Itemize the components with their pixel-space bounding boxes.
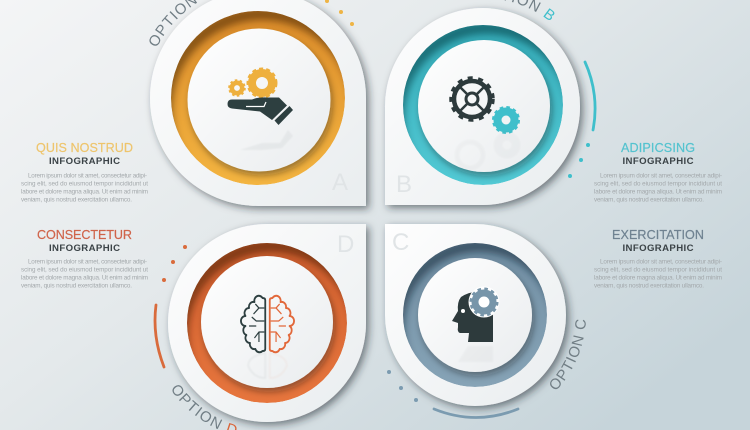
decoration: D arc and dots <box>155 245 187 367</box>
teal ring B <box>403 25 563 185</box>
text block: Consectetur: CONSECTETUR <box>37 228 132 242</box>
text block: Adipicsing: labore et dolore magna aliqua. Ut enim ad minim <box>594 188 722 196</box>
letter A: A <box>332 169 348 196</box>
inner disc C <box>418 258 532 372</box>
text block: Quis Nostrud: labore et dolore magna aliqua. Ut enim ad minim <box>21 188 148 196</box>
letter B: B <box>396 171 412 198</box>
panel: option B <box>385 8 580 206</box>
text block: Consectetur: labore et dolore magna aliqua. Ut enim ad minim <box>21 274 148 282</box>
text block: Quis Nostrud: QUIS NOSTRUD <box>36 141 133 155</box>
text block: Adipicsing: ADIPICSING <box>621 141 695 155</box>
text block: Exercitation: Lorem ipsum dolor sit amet, consectetur adipi- <box>600 258 722 266</box>
letter C: C <box>392 229 409 256</box>
panel: option A <box>150 0 366 206</box>
orange-red ring D <box>187 243 347 403</box>
text block: Exercitation: INFOGRAPHIC <box>622 243 694 254</box>
teardrop card A <box>150 0 366 206</box>
text block: Quis Nostrud <box>21 141 148 204</box>
icon: two gears <box>451 78 518 168</box>
text block: Consectetur: INFOGRAPHIC <box>49 243 120 254</box>
text block: Consectetur: scing elit, sed do eiusmod tempor incididunt ut <box>21 266 148 274</box>
decoration: C arc and dots <box>387 370 518 418</box>
text block: Adipicsing: Lorem ipsum dolor sit amet, consectetur adipi- <box>600 172 722 180</box>
text block: Quis Nostrud: INFOGRAPHIC <box>49 156 120 167</box>
text block: Exercitation: labore et dolore magna aliqua. Ut enim ad minim <box>594 274 722 282</box>
decoration: B arc and dots <box>568 62 595 178</box>
text block: Consectetur <box>21 228 148 290</box>
text block: Adipicsing <box>594 141 722 204</box>
text block: Exercitation: EXERCITATION <box>612 228 704 242</box>
icon: head with gear <box>452 286 500 362</box>
text block: Adipicsing: scing elit, sed do eiusmod tempor incididunt ut <box>594 180 722 188</box>
text block: Quis Nostrud: Lorem ipsum dolor sit amet, consectetur adipi- <box>28 172 147 180</box>
teardrop card C <box>385 224 566 406</box>
panel: option C <box>385 224 566 408</box>
letter D: D <box>337 231 354 258</box>
icon: brain <box>241 296 294 378</box>
orange ring A <box>171 11 345 185</box>
slate ring C <box>403 243 547 387</box>
text block: Consectetur: Lorem ipsum dolor sit amet, consectetur adipi- <box>28 258 147 266</box>
text block: Quis Nostrud: veniam, quis nostrud exercitation ullamco. <box>21 196 132 204</box>
text block: Exercitation: scing elit, sed do eiusmod tempor incididunt ut <box>594 266 722 274</box>
inner disc A <box>188 28 330 172</box>
text block: Adipicsing: INFOGRAPHIC <box>622 156 694 167</box>
teardrop card B <box>385 8 580 205</box>
inner disc B <box>418 40 550 172</box>
icon: hand holding gears <box>228 69 293 150</box>
inner disc D <box>201 256 333 388</box>
text block: Exercitation <box>594 228 722 290</box>
curved label: option C: OPTION C <box>550 320 586 390</box>
panel: option D <box>168 224 366 424</box>
text block: Adipicsing: veniam, quis nostrud exercitation ullamco. <box>594 196 704 204</box>
text block: Quis Nostrud: scing elit, sed do eiusmod tempor incididunt ut <box>21 180 148 188</box>
decoration: A dots <box>325 0 354 26</box>
text block: Consectetur: veniam, quis nostrud exercitation ullamco. <box>21 282 132 290</box>
text block: Exercitation: veniam, quis nostrud exercitation ullamco. <box>594 282 704 290</box>
teardrop card D <box>168 224 366 422</box>
